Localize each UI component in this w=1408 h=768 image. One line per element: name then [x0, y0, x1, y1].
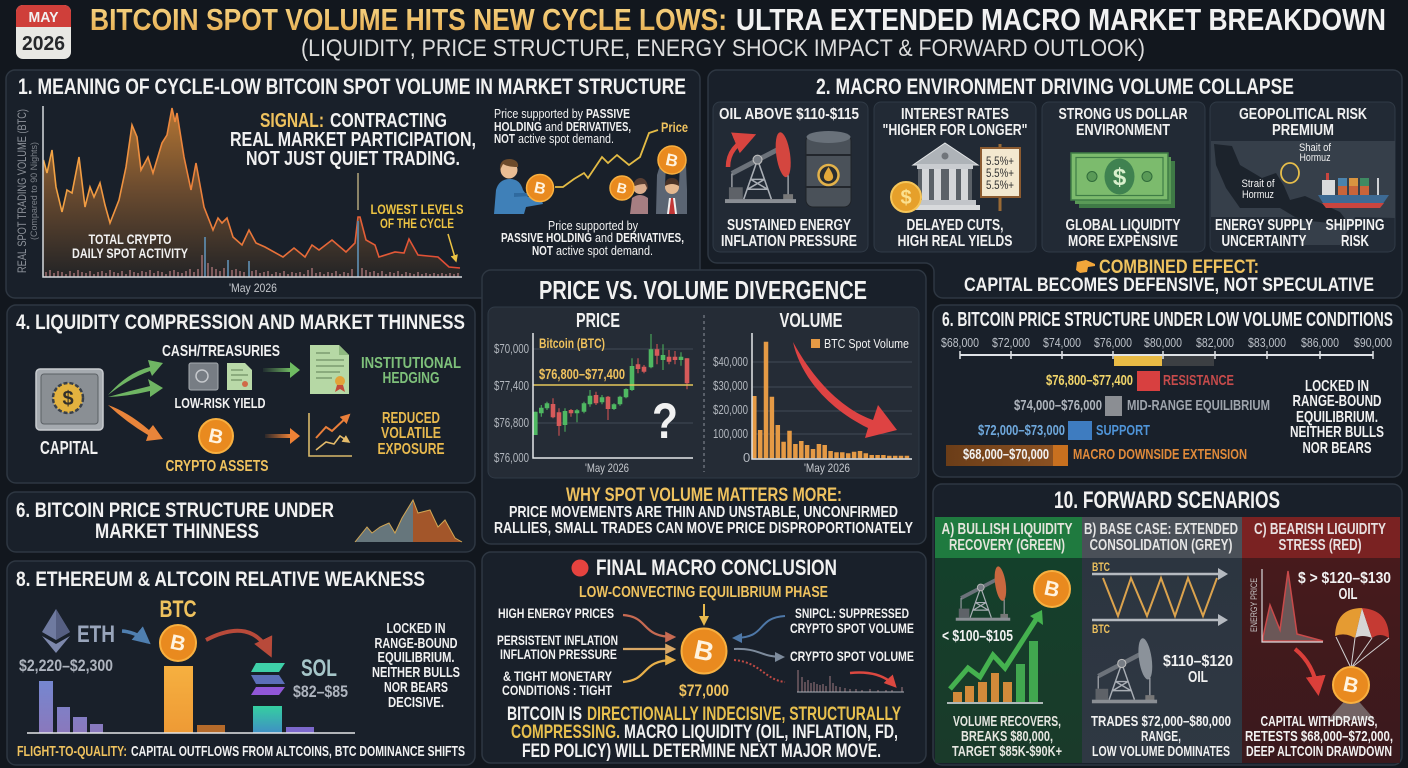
panel 4: liquidity compression: [7, 305, 475, 483]
level: mid-range equilibrium: $74,000–$76,000: [1014, 397, 1102, 414]
card: geopolitical risk: SHIPPING: [1326, 217, 1384, 234]
scenario B: base case: OIL: [1188, 669, 1208, 686]
label: reduced volatile exposure: [378, 410, 444, 458]
scenario A: bullish: A) BULLISH LIQUIDITY: [942, 521, 1073, 538]
SOL logo and price: [251, 655, 348, 701]
bitcoin: crypto assets: B: [206, 425, 225, 449]
cash and treasuries: [162, 343, 280, 412]
axis label: (Compared to 90 Nights): [29, 142, 39, 240]
card: oil: [713, 102, 868, 252]
panel 6: price structure under low volume: [933, 305, 1402, 477]
conclusion text: MACRO LIQUIDITY (OIL, INFLATION, FD,: [624, 722, 898, 743]
label: institutional hedging: HEDGING: [382, 370, 440, 387]
scenario B: base case: CONSOLIDATION (GREY): [1090, 537, 1232, 554]
card: interest rates: "HIGHER FOR LONGER": [882, 122, 1028, 139]
arrow: drop: [1295, 649, 1318, 692]
price ruler: $86,000: [1301, 335, 1339, 350]
panel: price vs volume divergence: [482, 270, 926, 544]
icon: capital safe: $: [62, 388, 74, 410]
level: support: [978, 421, 1150, 440]
card: interest rates: DELAYED CUTS,: [906, 217, 1004, 234]
scenario C: bearish: OIL: [1338, 586, 1358, 603]
ETH logo and price: ETH: [77, 621, 115, 648]
signal callout: CONTRACTING: [330, 110, 447, 132]
BTC label and coin: [160, 596, 196, 661]
card: geopolitical risk: PREMIUM: [1272, 122, 1334, 139]
heading: [16, 498, 334, 543]
level: macro downside extension: MACRO DOWNSIDE EXTENSION: [1073, 446, 1247, 463]
icon: parachute with bitcoin: B: [1341, 673, 1361, 698]
card: geopolitical risk: ENERGY SUPPLY: [1215, 217, 1313, 234]
range diagram: [1092, 560, 1228, 636]
price ruler: [941, 335, 1392, 366]
icon: rate sign: [981, 144, 1020, 211]
card: geopolitical risk: UNCERTAINTY: [1222, 233, 1307, 250]
arrows: capital to assets: [108, 360, 163, 441]
title: BITCOIN SPOT VOLUME HITS NEW CYCLE LOWS:: [90, 2, 727, 37]
card: oil: OIL ABOVE $110-$115: [719, 106, 859, 123]
note: price support: and: [545, 120, 563, 134]
candlestick chart: price: $76,800–$77,400: [539, 366, 625, 383]
subtitle: (LIQUIDITY, PRICE STRUCTURE, ENERGY SHOCK IMPACT & FORWARD OUTLOOK): [301, 35, 1145, 62]
output labels: [790, 605, 914, 664]
illustration: holders raising bitcoin: B: [664, 150, 680, 171]
price line: [555, 119, 688, 187]
range-bound note: DECISIVE.: [388, 695, 444, 711]
flight to quality footer: FLIGHT-TO-QUALITY:: [17, 743, 127, 760]
subheading: LOW-CONVECTING EQUILIBRIUM PHASE: [579, 584, 828, 601]
price line: Price: [661, 119, 688, 135]
candlestick chart: price: [494, 310, 693, 475]
chart caption: TOTAL CRYPTO: [88, 231, 172, 247]
panel 8: ethereum and altcoin weakness: [7, 561, 475, 765]
label: institutional hedging: INSTITUTIONAL: [361, 355, 461, 372]
heading: 2. MACRO ENVIRONMENT DRIVING VOLUME COLLAPSE: [816, 74, 1294, 99]
card: geopolitical risk: [1210, 102, 1395, 252]
bar chart: volume: 'May 2026: [804, 461, 850, 475]
icon: calendar May 2026: 2026: [22, 33, 65, 55]
icon: capital safe: CAPITAL: [40, 438, 98, 458]
range-bound note: EQUILIBRIUM.: [378, 650, 454, 666]
level: mid-range equilibrium: [1014, 396, 1270, 416]
arrow: ETH to BTC: [122, 631, 148, 642]
input labels: HIGH ENERGY PRICES: [498, 605, 614, 621]
input labels: CONDITIONS : TIGHT: [502, 682, 612, 698]
scenario C: bearish: [1242, 517, 1400, 763]
illustration: man with bitcoin: B: [532, 179, 547, 198]
level: mid-range equilibrium: MID-RANGE EQUILIBRIUM: [1127, 397, 1270, 414]
label: reduced volatile exposure: EXPOSURE: [378, 441, 444, 458]
icon: declining exposure chart: [309, 413, 352, 456]
range-bound note: NOR BEARS: [1302, 440, 1372, 457]
heading: MARKET THINNESS: [95, 519, 259, 543]
range diagram: BTC: [1092, 622, 1110, 636]
heading: 6. BITCOIN PRICE STRUCTURE UNDER: [16, 498, 334, 522]
range-bound note: LOCKED IN: [1305, 378, 1369, 395]
flight to quality footer: [17, 743, 465, 760]
bar chart: volume: $20,000: [713, 402, 748, 417]
note: price support repeated: DERIVATIVES,: [616, 231, 684, 245]
card: oil: SUSTAINED ENERGY: [727, 217, 852, 234]
label: reduced volatile exposure: VOLATILE: [381, 425, 441, 442]
panel: final macro conclusion: [482, 552, 926, 763]
note: price support: Price supported by: [494, 107, 584, 121]
panel 6: price structure under market thinness: [7, 492, 475, 552]
BTC label and coin: B: [168, 631, 188, 656]
candlestick chart: price: $77,400: [494, 378, 529, 393]
icon: certificate: [310, 345, 349, 394]
icon: rate sign: 5.5%+: [986, 166, 1014, 180]
icon: oil barrel: [806, 131, 851, 207]
flight to quality footer: CAPITAL OUTFLOWS FROM ALTCOINS, BTC DOMINANCE SHIFTS: [131, 743, 465, 760]
range-bound note: NEITHER BULLS: [372, 665, 460, 681]
why spot volume matters: PRICE MOVEMENTS ARE THIN AND UNSTABLE, UNCONFIRMED: [509, 504, 898, 521]
heading: 1. MEANING OF CYCLE-LOW BITCOIN SPOT VOLUME IN MARKET STRUCTURE: [18, 74, 686, 99]
note: price support repeated: Price supported by: [548, 219, 639, 233]
scenario C: bearish: $ > $120–$130: [1298, 570, 1391, 587]
candlestick chart: price: $76,000: [494, 450, 529, 465]
level: support: SUPPORT: [1096, 422, 1150, 439]
scenario B: base case: $110–$120: [1163, 653, 1233, 670]
bar and trend chart: [947, 610, 1043, 703]
scenario B: base case: B) BASE CASE: EXTENDED: [1084, 521, 1238, 538]
note: price support: DERIVATIVES,: [566, 120, 631, 134]
range-bound note: NOR BEARS: [384, 680, 448, 696]
output labels: SNIPCL: SUPPRESSED: [795, 605, 909, 621]
price ruler: $83,000: [1248, 335, 1286, 350]
conclusion text: FED POLICY) WILL DETERMINE NEXT MAJOR MOVE.: [522, 741, 881, 762]
scenario A: bullish: < $100–$105: [942, 628, 1013, 645]
energy price spike chart: [1249, 569, 1323, 642]
chart caption: DAILY SPOT ACTIVITY: [72, 245, 189, 261]
scenario A: bullish: TARGET $85K-$90K+: [952, 743, 1062, 760]
icon: rate sign: 5.5%+: [986, 154, 1014, 168]
note: price support: NOT: [494, 132, 515, 146]
heading: 10. FORWARD SCENARIOS: [1054, 487, 1280, 514]
axis label: [15, 109, 39, 273]
candlestick chart: price: Bitcoin (BTC): [539, 335, 605, 351]
combined effect callout: [964, 256, 1374, 296]
arrow: down to bitcoin: [703, 604, 705, 624]
illustration: man with bitcoin: [494, 159, 554, 214]
signal callout: SIGNAL:: [260, 110, 324, 132]
note: price support repeated: and: [595, 231, 613, 245]
bitcoin coin at 77000: B: [691, 634, 717, 668]
arrow: BTC to SOL: [206, 631, 270, 654]
callout: lowest levels: OF THE CYCLE: [380, 215, 454, 231]
heading: FINAL MACRO CONCLUSION: [596, 555, 837, 580]
icon: oil pump: [956, 566, 1010, 621]
heading: 4. LIQUIDITY COMPRESSION AND MARKET THINNESS: [16, 310, 465, 334]
bitcoin coin at 77000: $77,000: [679, 681, 729, 700]
scenario B: base case: RANGE,: [1141, 728, 1181, 745]
arrow: falling volume: [793, 342, 897, 438]
why spot volume matters: WHY SPOT VOLUME MATTERS MORE:: [566, 485, 842, 506]
price ruler: $74,000: [1043, 335, 1081, 350]
price ruler: $72,000: [992, 335, 1030, 350]
bitcoin coin at 77000: [679, 628, 729, 700]
cash and treasuries: CASH/TREASURIES: [162, 343, 280, 360]
card: strong dollar: GLOBAL LIQUIDITY: [1066, 217, 1181, 234]
bitcoin coin: [1034, 571, 1070, 607]
axis label: REAL SPOT TRADING VOLUME (BTC): [15, 109, 29, 273]
signal callout: NOT JUST QUIET TRADING.: [246, 148, 460, 170]
bitcoin: crypto assets: CRYPTO ASSETS: [166, 458, 268, 475]
icon: calendar May 2026: [16, 5, 71, 59]
mini mountain chart: [355, 500, 462, 542]
candlestick chart: price: ?: [652, 393, 678, 449]
bitcoin: crypto assets: [166, 419, 268, 475]
scenario B: base case: LOW VOLUME DOMINATES: [1092, 743, 1230, 760]
price ruler: $76,000: [1094, 335, 1132, 350]
energy price spike chart: ENERGY PRICE: [1249, 578, 1259, 632]
card: interest rates: [874, 102, 1036, 252]
range-bound note: [372, 621, 460, 711]
map: strait of Hormuz: Hormuz: [1242, 189, 1274, 201]
candlestick chart: price: $76,800: [494, 415, 529, 430]
mini chart: falling volume: [797, 670, 904, 692]
icon: capital safe: [36, 369, 103, 458]
title: [90, 2, 1386, 37]
illustration: holders raising bitcoin: [610, 146, 687, 214]
range-bound note: LOCKED IN: [386, 621, 446, 637]
icon: pointing hand: [1076, 260, 1095, 273]
arrows: outputs: [734, 616, 785, 682]
price ruler: $68,000: [941, 335, 979, 350]
conclusion text: COMPRESSING.: [511, 722, 620, 743]
label: institutional hedging: [361, 355, 461, 387]
signal callout: REAL MARKET PARTICIPATION,: [230, 129, 476, 151]
card: geopolitical risk: GEOPOLITICAL RISK: [1239, 106, 1368, 123]
scenario A: bullish: RECOVERY (GREEN): [949, 537, 1065, 554]
level: resistance: $76,800–$77,400: [1046, 372, 1133, 389]
card: geopolitical risk: RISK: [1341, 233, 1370, 250]
candlestick chart: price: 'May 2026: [585, 461, 629, 475]
scenario C: bearish: STRESS (RED): [1278, 537, 1362, 554]
card: strong dollar: MORE EXPENSIVE: [1068, 233, 1178, 250]
arrow: to reduced exposure: [265, 428, 300, 444]
SOL logo and price: SOL: [301, 655, 337, 682]
note: price support repeated: [501, 219, 684, 258]
icon: rate sign: 5.5%+: [986, 178, 1014, 192]
callout: lowest levels: [370, 201, 464, 261]
icon: dollar bills: $: [1113, 164, 1127, 191]
scenario A: bullish: VOLUME RECOVERS,: [953, 713, 1061, 730]
panel 2: macro environment: [708, 70, 1402, 298]
header: [16, 2, 1386, 62]
level: resistance: [1046, 371, 1234, 391]
card: oil: INFLATION PRESSURE: [721, 233, 857, 250]
output labels: CRYPTO SPOT VOLUME: [790, 620, 914, 636]
illustration: holders raising bitcoin: B: [615, 179, 629, 197]
label: reduced volatile exposure: REDUCED: [382, 410, 440, 427]
icon: rising arrow: [728, 136, 752, 167]
scenario B: base case: TRADES $72,000–$80,000: [1091, 713, 1231, 730]
signal callout: [230, 110, 476, 170]
price ruler: $82,000: [1196, 335, 1234, 350]
card: strong dollar: [1042, 102, 1205, 252]
range-bound note: RANGE-BOUND: [1292, 393, 1382, 410]
conclusion text: DIRECTIONALLY INDECISIVE, STRUCTURALLY: [587, 704, 901, 725]
note: price support repeated: active spot demand.: [556, 244, 653, 258]
bar chart: volume: [713, 310, 912, 475]
map: strait of Hormuz: Shait of: [1299, 142, 1332, 154]
range diagram: BTC: [1092, 560, 1110, 574]
icon: oil pump: [1092, 637, 1157, 703]
arrows: inputs to bitcoin: [623, 615, 674, 682]
note: price support: active spot demand.: [518, 132, 614, 146]
bitcoin coin: B: [1042, 577, 1062, 602]
map: strait of Hormuz: Strait of: [1242, 178, 1275, 190]
why spot volume matters: RALLIES, SMALL TRADES CAN MOVE PRICE DISPROPORTIONATELY: [494, 520, 913, 537]
icon: parachute with bitcoin: [1328, 608, 1389, 720]
date label: 'May 2026: [229, 281, 277, 295]
note: price support: PASSIVE: [586, 107, 630, 121]
area chart: total crypto spot activity: [43, 106, 462, 277]
input labels: [497, 605, 618, 698]
candlestick chart: price: PRICE: [576, 310, 620, 332]
card: strong dollar: ENVIRONMENT: [1076, 122, 1170, 139]
scenario A: bullish: [935, 517, 1082, 763]
BTC label and coin: BTC: [160, 596, 196, 623]
output labels: CRYPTO SPOT VOLUME: [790, 648, 914, 664]
heading: 8. ETHEREUM & ALTCOIN RELATIVE WEAKNESS: [16, 567, 425, 591]
level: support: $72,000–$73,000: [978, 422, 1065, 439]
bar chart: volume: $40,000: [713, 354, 748, 369]
level: macro downside extension: $68,000–$70,000: [963, 446, 1049, 463]
note: price support: HOLDING: [494, 120, 542, 134]
heading: PRICE VS. VOLUME DIVERGENCE: [539, 275, 867, 305]
icon: dollar coin: [891, 182, 921, 212]
range-bound note: EQUILIBRIUM.: [1296, 409, 1378, 426]
level: macro downside extension: [946, 445, 1247, 466]
icon: dollar coin: $: [900, 187, 912, 209]
note: price support repeated: NOT: [532, 244, 553, 258]
map: strait of Hormuz: Hormuz: [1300, 152, 1330, 164]
why spot volume matters: [494, 485, 913, 537]
combined effect callout: COMBINED EFFECT:: [1099, 256, 1259, 278]
panel 10: forward scenarios: [933, 484, 1402, 765]
price ruler: $80,000: [1144, 335, 1182, 350]
bar chart: volume: 0: [743, 450, 750, 465]
price ruler: $90,000: [1354, 335, 1392, 350]
range-bound note: RANGE-BOUND: [374, 636, 458, 652]
input labels: PERSISTENT INFLATION: [497, 632, 618, 648]
chart caption: [72, 231, 189, 261]
level: resistance: RESISTANCE: [1163, 372, 1234, 389]
callout: lowest levels: LOWEST LEVELS: [370, 201, 464, 217]
ETH logo and price: [19, 609, 115, 675]
SOL logo and price: $82–$85: [293, 682, 348, 701]
legend: BTC Spot Volume: [824, 336, 909, 351]
scenario A: bullish: BREAKS $80,000,: [961, 728, 1053, 745]
card: strong dollar: STRONG US DOLLAR: [1058, 106, 1188, 123]
icon: bank: [908, 143, 980, 210]
note: price support: [494, 107, 631, 146]
input labels: INFLATION PRESSURE: [500, 646, 617, 662]
candlestick chart: price: $70,000: [494, 341, 529, 356]
ETH logo and price: $2,220–$2,300: [19, 656, 113, 675]
scenario B: base case: [1082, 517, 1242, 763]
cash and treasuries: LOW-RISK YIELD: [174, 395, 266, 412]
icon: dollar bills: [1071, 153, 1175, 208]
range-bound note: [1290, 378, 1384, 457]
icon: calendar May 2026: MAY: [28, 9, 58, 26]
card: interest rates: HIGH REAL YIELDS: [898, 233, 1012, 250]
conclusion text: [507, 704, 901, 762]
map: strait of Hormuz: [1211, 141, 1395, 245]
bar chart: volume: $30,000: [713, 378, 748, 393]
bar chart: volume: 100,000: [713, 426, 748, 441]
icon: cargo ship: [1318, 173, 1389, 208]
icon: oil pump: [725, 131, 796, 203]
conclusion text: BITCOIN IS: [507, 704, 582, 725]
note: price support repeated: PASSIVE HOLDING: [501, 231, 592, 245]
chart frame: [488, 307, 919, 478]
panel 1: meaning of cycle-low volume: [6, 70, 700, 298]
card: interest rates: INTEREST RATES: [901, 106, 1009, 123]
arrow: to institutional hedging: [263, 362, 300, 378]
bar chart: volume: VOLUME: [780, 310, 842, 332]
input labels: & TIGHT MONETARY: [503, 668, 613, 684]
bar chart: relative strength: [27, 666, 355, 733]
